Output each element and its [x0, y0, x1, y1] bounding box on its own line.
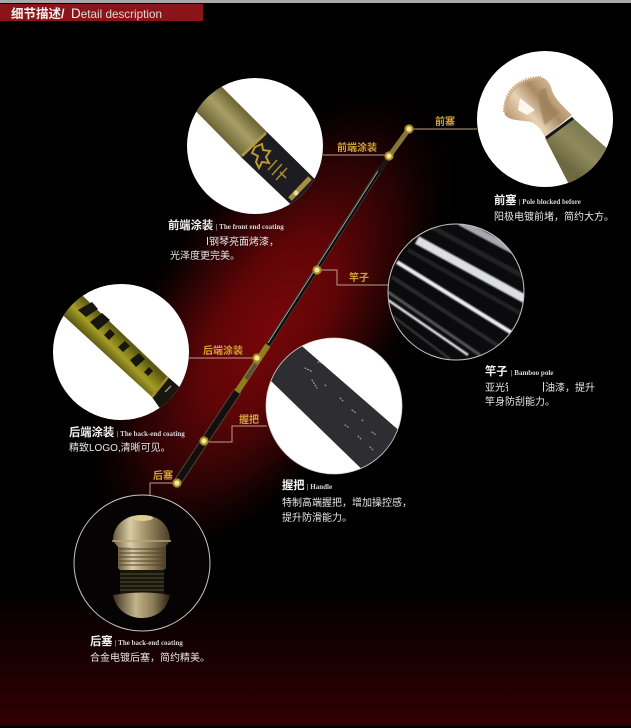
caption: handle: 握把	[282, 478, 305, 492]
caption: front-end coating: 前端涂装	[168, 218, 213, 232]
fishing rod	[177, 129, 409, 483]
label: front-end coating: 前端涂装	[337, 141, 377, 154]
caption: front stopper	[494, 193, 614, 223]
caption: back stopper: 后塞	[90, 634, 113, 648]
caption: front-end coating: 钢琴亮面烤漆，	[209, 235, 279, 248]
caption: front-end coating: | The front end coating	[216, 223, 284, 231]
caption: back stopper	[90, 634, 210, 664]
caption: handle: 提升防滑能力。	[282, 511, 352, 524]
detail photo: front stopper	[477, 51, 613, 187]
detail photo: pole	[388, 222, 535, 360]
caption: front stopper: | Pole blocked before	[519, 198, 581, 206]
caption: back-end coating: 后端涂装	[69, 425, 114, 439]
caption: back-end coating: 精致LOGO,清晰可见。	[69, 441, 171, 454]
caption: pole: | Bamboo pole	[511, 369, 553, 377]
caption: front stopper: 阳极电镀前堵，简约大方。	[494, 210, 614, 223]
label: handle: 握把	[239, 413, 259, 426]
label: back-end coating: 后端涂装	[203, 344, 243, 357]
label: front stopper: 前塞	[435, 115, 455, 128]
caption: pole: 亚光钢琴亮面油漆，提升	[485, 381, 595, 394]
connector lines	[150, 129, 477, 495]
label: back stopper: 后塞	[153, 469, 173, 482]
caption: pole: 竿身防刮能力。	[485, 395, 555, 408]
caption: front stopper: 前塞	[494, 193, 517, 207]
header bar: detail description	[0, 4, 203, 21]
header bar: detail description: Detail description	[71, 6, 162, 21]
caption: handle: 特制高端握把，增加操控感，	[282, 496, 412, 509]
caption: back-end coating: | The back-end coating	[117, 430, 185, 438]
caption: back-end coating	[69, 425, 185, 454]
detail photo: back stopper	[74, 495, 210, 631]
caption: pole: 竿子	[485, 364, 508, 378]
caption: back stopper: | The back-end coating	[115, 639, 183, 647]
caption: pole	[485, 364, 595, 408]
caption: handle	[282, 478, 412, 524]
detail photo: front-end coating	[187, 78, 323, 214]
rod markers	[173, 125, 413, 487]
caption: front-end coating	[168, 218, 284, 262]
caption: handle: | Handle	[307, 483, 332, 491]
caption: front-end coating: 光泽度更完美。	[170, 249, 240, 262]
label: pole: 竿子	[349, 271, 369, 284]
detail photo: handle	[266, 338, 402, 474]
detail photo: back-end coating	[53, 284, 189, 420]
header bar: detail description: 细节描述/	[11, 6, 65, 21]
caption: back stopper: 合金电镀后塞，简约精美。	[90, 651, 210, 664]
